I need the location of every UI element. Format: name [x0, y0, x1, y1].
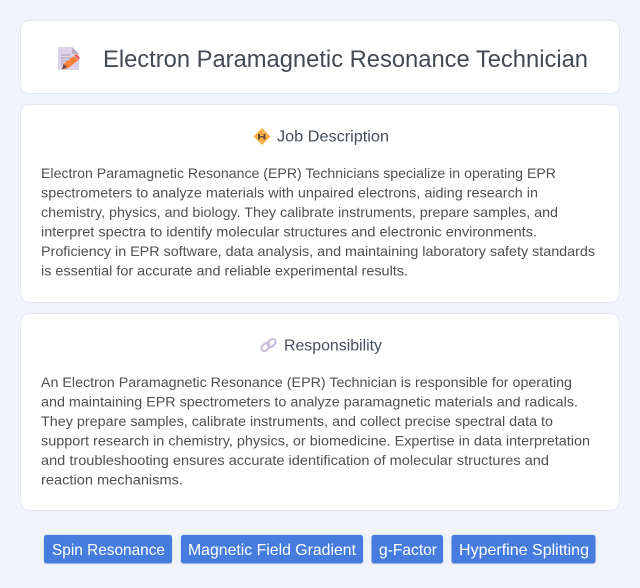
heading: job description: Job Description — [277, 128, 389, 146]
text block: responsibility — [41, 374, 590, 488]
panel: job description — [20, 104, 620, 302]
icon: document with pencil — [58, 47, 80, 70]
text block: responsibility: support research in chemistry, physics, or biomedicine. Expertise in data interpretation — [41, 433, 590, 449]
text block: job description: chemistry, physics, and biology. They calibrate instruments, prepare samples, and — [41, 204, 558, 220]
icon: chain link — [260, 338, 277, 352]
panel: responsibility — [20, 314, 620, 510]
tag: magnetic field gradient: Magnetic Field Gradient — [188, 542, 357, 559]
tag: spin resonance — [44, 534, 172, 564]
text block: responsibility: and maintaining EPR spectrometers to analyze paramagnetic materials and radicals. — [41, 394, 578, 410]
tag: hyperfine splitting — [451, 534, 596, 564]
tag: hyperfine splitting: Hyperfine Splitting — [459, 542, 589, 559]
text block: responsibility: reaction mechanisms. — [41, 472, 183, 488]
tag: g-factor — [371, 534, 444, 564]
panel: header — [20, 20, 620, 94]
icon: orange diamond — [254, 128, 270, 145]
text block: responsibility: They prepare samples, calibrate instruments, and collect precise spectral data to — [41, 413, 553, 429]
tags row — [44, 534, 596, 564]
text block: job description: spectrometers to analyze materials with unpaired electrons, aiding research in — [41, 185, 538, 201]
text block: job description: interpret spectra to identify molecular structures and electronic environments. — [41, 224, 537, 240]
text block: job description: Electron Paramagnetic Resonance (EPR) Technicians specialize in operating EPR — [41, 165, 556, 181]
title: Electron Paramagnetic Resonance Technician — [103, 46, 588, 73]
text block: job description: Proficiency in EPR software, data analysis, and maintaining laboratory safety standards — [41, 243, 595, 259]
tag: g-factor: g-Factor — [379, 542, 438, 559]
tag: magnetic field gradient — [180, 534, 364, 564]
tag: spin resonance: Spin Resonance — [52, 542, 165, 559]
text block: responsibility: and troubleshooting ensures accurate identification of molecular structures and — [41, 452, 549, 468]
text block: responsibility: An Electron Paramagnetic Resonance (EPR) Technician is responsible for operating — [41, 374, 572, 390]
text block: job description: is essential for accurate and reliable experimental results. — [41, 263, 408, 279]
text block: job description — [41, 165, 595, 279]
heading: responsibility: Responsibility — [284, 337, 382, 354]
